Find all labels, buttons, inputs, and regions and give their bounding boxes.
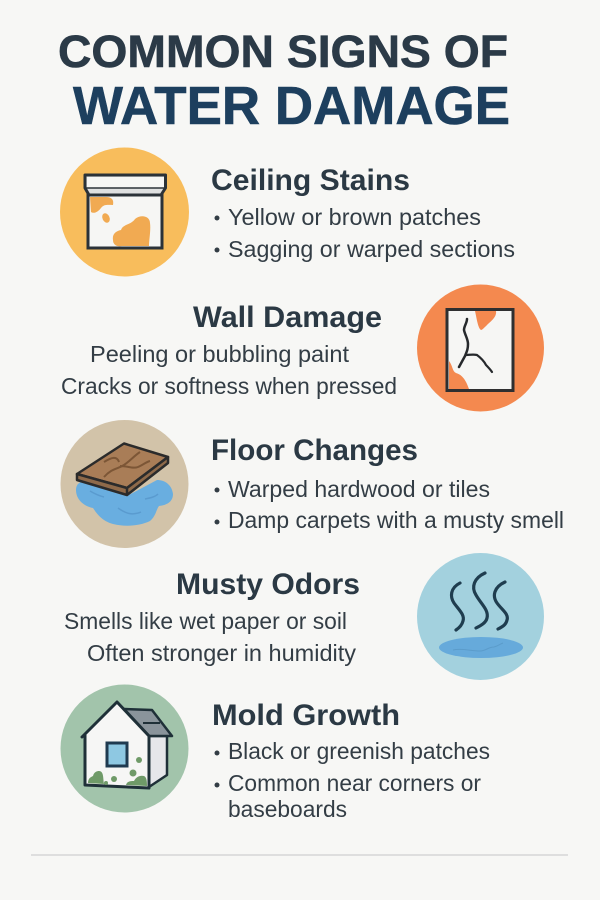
bullet list: mold growth: baseboards <box>228 796 347 822</box>
heading: wall damage: Wall Damage <box>193 301 382 334</box>
bullet list: mold growth <box>214 738 490 822</box>
text list: musty odors <box>64 608 357 666</box>
text list: wall damage: Cracks or softness when pressed <box>61 373 397 399</box>
text list: wall damage <box>61 341 397 399</box>
heading: mold growth: Mold Growth <box>212 699 400 732</box>
bullet list: mold growth: Black or greenish patches <box>228 738 490 764</box>
icon: odor waves over puddle <box>417 553 544 680</box>
bullet list: floor changes: Warped hardwood or tiles <box>228 476 490 502</box>
bullet list: ceiling stains: Sagging or warped sections <box>228 236 515 262</box>
title: COMMON SIGNS OF <box>58 26 508 77</box>
bullet list: ceiling stains <box>214 204 515 262</box>
panel: ceiling stains <box>60 148 515 276</box>
panel: wall damage <box>61 284 544 412</box>
bullet list: floor changes <box>214 476 564 533</box>
text list: musty odors: Smells like wet paper or soil <box>64 608 347 634</box>
icon: ceiling stain <box>60 148 189 276</box>
title: WATER DAMAGE <box>73 76 510 136</box>
text list: wall damage: Peeling or bubbling paint <box>90 341 350 367</box>
bullet list: ceiling stains: Yellow or brown patches <box>228 204 481 230</box>
bullet list: mold growth: Common near corners or <box>228 770 481 796</box>
heading: ceiling stains: Ceiling Stains <box>211 164 410 197</box>
panel: mold growth <box>60 684 490 822</box>
heading: floor changes: Floor Changes <box>211 434 418 467</box>
text list: musty odors: Often stronger in humidity <box>87 640 357 666</box>
heading: musty odors: Musty Odors <box>176 568 360 601</box>
icon: cracked wall <box>417 284 544 412</box>
panel: floor changes <box>60 420 564 548</box>
icon: house with mold <box>60 684 188 812</box>
panel: musty odors <box>64 553 544 680</box>
bullet list: floor changes: Damp carpets with a musty smell <box>228 507 564 533</box>
title <box>58 26 510 136</box>
icon: warped floor board <box>60 420 188 548</box>
